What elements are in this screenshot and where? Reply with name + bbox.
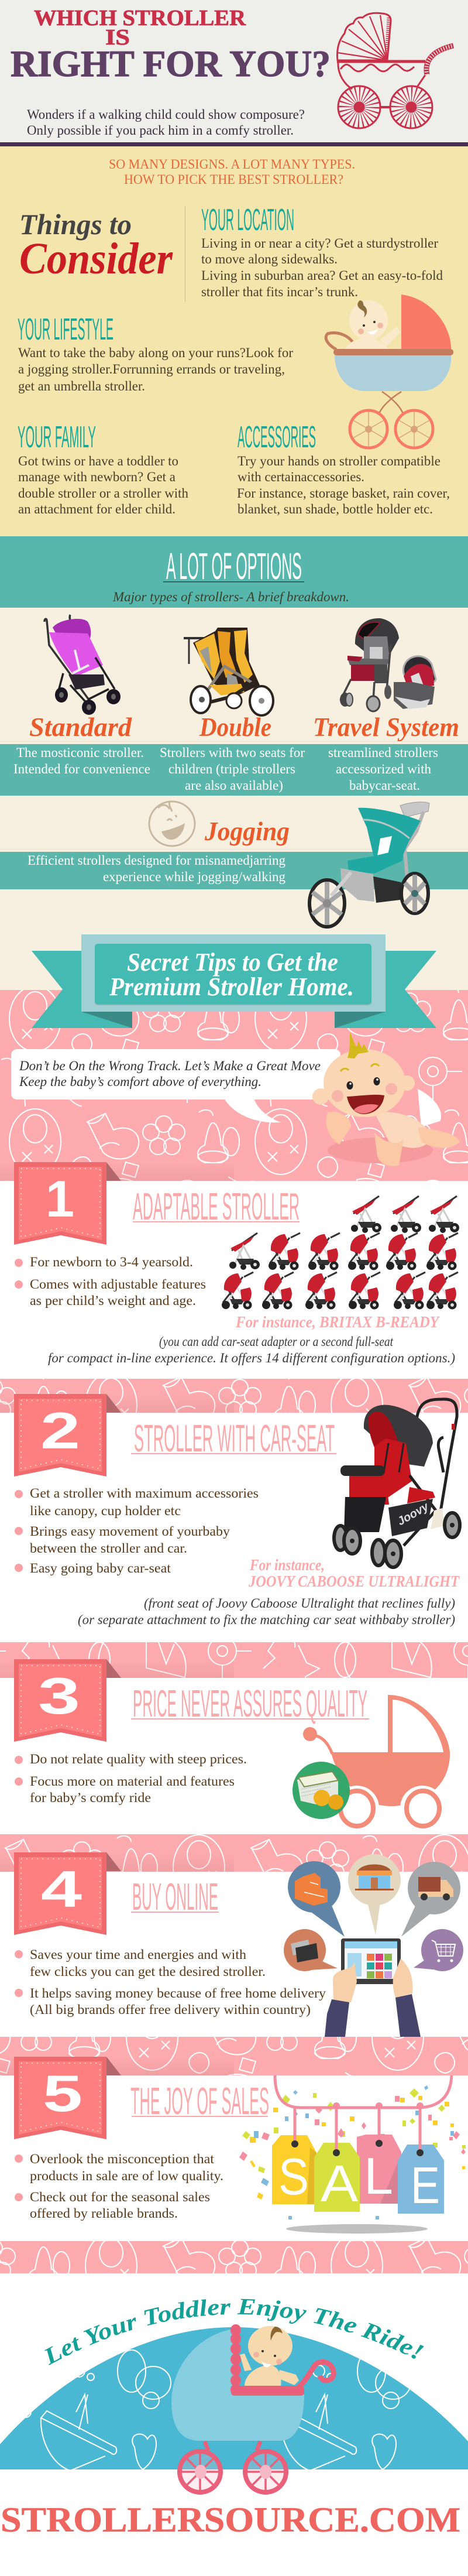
icon: pram silhouette bbox=[303, 1695, 450, 1830]
title line 1: WHICH STROLLER bbox=[34, 6, 246, 30]
badge: number 4 bbox=[14, 1852, 121, 1935]
example note bbox=[78, 1596, 455, 1627]
section 4: buy online: BUY ONLINE bbox=[132, 1875, 218, 1918]
block: your family: manage with newborn? Get a bbox=[18, 470, 176, 484]
sale tags illustration: L bbox=[364, 2147, 393, 2205]
description: standard: The mosticonic stroller. bbox=[16, 745, 144, 760]
icon: truck bubble bbox=[401, 1862, 460, 1937]
block: accessories: with certainaccessories. bbox=[238, 470, 364, 484]
bullet list: Get a stroller with maximum accessories bbox=[30, 1486, 259, 1501]
panel: header bbox=[0, 0, 468, 146]
icon: crawling baby bbox=[312, 1032, 460, 1166]
ribbon banner bbox=[32, 934, 436, 1028]
bullet list: It helps saving money because of free home delivery bbox=[30, 1986, 326, 2000]
bullet list bbox=[15, 2152, 223, 2221]
icon: laughing baby face bbox=[149, 801, 195, 846]
badge: number 5 bbox=[14, 2057, 121, 2139]
heading: things to: Things to bbox=[19, 208, 132, 241]
description: travel system: streamlined strollers bbox=[328, 745, 438, 760]
example label: For instance, BRITAX B-READY bbox=[235, 1313, 440, 1331]
block: your family: an attachment for elder child. bbox=[18, 502, 176, 516]
description: double: Strollers with two seats for bbox=[160, 745, 305, 760]
icon: store bubble bbox=[348, 1854, 401, 1935]
icon: baby in pink and blue pram bbox=[171, 2324, 333, 2492]
block: your location: Living in or near a city? Get a sturdystroller bbox=[201, 236, 438, 251]
section 1: adaptable stroller bbox=[14, 1162, 459, 1365]
block: your location bbox=[201, 203, 443, 299]
bullet list: Focus more on material and features bbox=[30, 1774, 235, 1789]
bullet list: Easy going baby car-seat bbox=[30, 1561, 171, 1575]
sale tags illustration: A bbox=[321, 2154, 358, 2212]
label: travel system: Travel System bbox=[313, 712, 459, 742]
footer panel bbox=[0, 2298, 468, 2539]
bullet list: for baby’s comfy ride bbox=[30, 1790, 151, 1805]
title line 3: RIGHT FOR YOU? bbox=[11, 43, 331, 84]
block: accessories: blanket, sun shade, bottle holder etc. bbox=[238, 502, 433, 516]
intro text bbox=[27, 107, 305, 138]
bullet list: (All big brands offer free delivery within country) bbox=[30, 2002, 311, 2017]
block: your location: to move along sidewalks. bbox=[201, 252, 338, 266]
icon: hands holding tablet bbox=[325, 1938, 421, 2037]
badge: number 1: 1 bbox=[46, 1170, 74, 1228]
badge: number 1 bbox=[14, 1162, 121, 1245]
grid of 15 stroller configurations bbox=[222, 1196, 459, 1309]
block: your family: YOUR FAMILY bbox=[18, 420, 96, 454]
block: your lifestyle bbox=[18, 313, 293, 393]
bullet list bbox=[15, 1752, 247, 1805]
subheading bbox=[109, 157, 355, 187]
closing pink band bbox=[0, 2241, 468, 2273]
sale tags illustration bbox=[239, 2075, 466, 2234]
bullet list: between the stroller and car. bbox=[30, 1541, 187, 1556]
panel: secret tips hero bbox=[0, 934, 468, 1181]
panel: a lot of options bbox=[0, 536, 468, 990]
icon: credit cards bubble bbox=[284, 1929, 338, 1971]
subheading: HOW TO PICK THE BEST STROLLER? bbox=[124, 172, 343, 187]
block: accessories bbox=[237, 420, 450, 516]
example note: (you can add car-seat adapter or a second full-seat bbox=[159, 1334, 394, 1349]
icon: parcels bubble bbox=[288, 1861, 345, 1937]
description: travel system bbox=[328, 745, 438, 793]
block: accessories: For instance, storage basket, rain cover, bbox=[237, 486, 450, 501]
stroller: standard bbox=[44, 615, 121, 715]
badge: number 4: 4 bbox=[41, 1860, 82, 1918]
badge: number 3 bbox=[14, 1659, 121, 1742]
section 5: the joy of sales bbox=[0, 2037, 468, 2234]
speech bubble bbox=[11, 1049, 340, 1122]
stroller: joovy caboose: Joovy bbox=[395, 1500, 431, 1528]
block: your location: Living in suburban area? Get an easy-to-fold bbox=[201, 268, 443, 283]
icon: cart bubble bbox=[414, 1929, 463, 1971]
intro text: Only possible if you pack him in a comfy stroller. bbox=[27, 123, 294, 138]
heading: consider: Consider bbox=[19, 234, 173, 283]
example label bbox=[248, 1556, 460, 1590]
block: accessories: ACCESSORIES bbox=[238, 420, 316, 454]
bullet list bbox=[15, 1255, 206, 1308]
subheading: Major types of strollers- A brief breakdown. bbox=[112, 590, 349, 604]
panel: things to consider bbox=[0, 146, 468, 536]
speech bubble: Keep the baby’s comfort above of everything. bbox=[19, 1074, 261, 1089]
subheading: SO MANY DESIGNS. A LOT MANY TYPES. bbox=[109, 157, 355, 172]
block: your family: Got twins or have a toddler to bbox=[18, 454, 178, 468]
bullet list: For newborn to 3-4 yearsold. bbox=[30, 1255, 193, 1269]
ribbon title: Secret Tips to Get the bbox=[127, 948, 338, 977]
section 2: stroller with car-seat bbox=[0, 1379, 468, 1627]
band: jogging description: Efficient strollers designed for misnamedjarring bbox=[27, 853, 285, 868]
description: double: are also available) bbox=[185, 778, 283, 793]
blue dome with pattern bbox=[0, 2327, 468, 2469]
bullet list: offered by reliable brands. bbox=[30, 2206, 178, 2221]
block: accessories: Try your hands on stroller compatible bbox=[238, 454, 441, 468]
bullet list: as per child’s weight and age. bbox=[30, 1293, 196, 1308]
closing slogan on arc: Let Your Toddler Enjoy The Ride! bbox=[44, 2298, 424, 2365]
badge: number 2 bbox=[14, 1394, 121, 1477]
stroller: jogging bbox=[309, 802, 429, 927]
description: travel system: accessorized with bbox=[336, 762, 431, 776]
badge: number 3: 3 bbox=[38, 1667, 80, 1725]
description: standard bbox=[13, 745, 150, 776]
sale tags illustration: S bbox=[278, 2147, 309, 2205]
bullet list: Check out for the seasonal sales bbox=[30, 2190, 210, 2204]
band: jogging description bbox=[0, 852, 468, 889]
example note: (or separate attachment to fix the matching car seat withbaby stroller) bbox=[78, 1612, 455, 1627]
bullet list: few clicks you can get the desired stroller. bbox=[30, 1964, 266, 1979]
description: travel system: babycar-seat. bbox=[349, 778, 420, 793]
block: your lifestyle: a jogging stroller.Forrunning errands or traveling, bbox=[18, 362, 285, 376]
icon: baby in blue stroller bbox=[326, 294, 453, 448]
label: jogging: Jogging bbox=[204, 817, 290, 846]
band: jogging description: experience while jogging/walking bbox=[103, 869, 285, 884]
bullet list: Do not relate quality with steep prices. bbox=[30, 1752, 247, 1766]
speech bubble: Don’t be On the Wrong Track. Let’s Make a Great Move bbox=[19, 1059, 321, 1073]
bullet list: products in sale are of low quality. bbox=[30, 2169, 223, 2183]
bullet list bbox=[15, 1486, 259, 1575]
title line 2: IS bbox=[105, 25, 130, 50]
badge: number 2: 2 bbox=[40, 1402, 80, 1460]
example label: For instance, bbox=[249, 1556, 325, 1574]
block: your lifestyle: get an umbrella stroller. bbox=[18, 379, 145, 393]
bullet list: like canopy, cup holder etc bbox=[30, 1503, 181, 1518]
block: your lifestyle: Want to take the baby along on your runs?Look for bbox=[18, 345, 293, 360]
bullet list: Comes with adjustable features bbox=[30, 1277, 206, 1292]
band: type descriptions bbox=[0, 744, 468, 796]
ribbon title bbox=[109, 948, 354, 1001]
label: standard: Standard bbox=[29, 712, 133, 742]
description: double: children (triple strollers bbox=[168, 762, 295, 776]
section 3: price never assures quality bbox=[0, 1642, 468, 1830]
bullet list: Overlook the misconception that bbox=[30, 2152, 215, 2166]
stroller: travel system bbox=[340, 618, 436, 711]
icon: sketched red pram bbox=[337, 13, 453, 128]
intro text: Wonders if a walking child could show composure? bbox=[27, 107, 305, 122]
block: your family: double stroller or a stroller with bbox=[18, 486, 188, 501]
sale tags illustration: E bbox=[411, 2156, 440, 2214]
label: double: Double bbox=[199, 712, 271, 742]
example note: for compact in-line experience. It offers 14 different configuration options.) bbox=[48, 1351, 455, 1365]
description: standard: Intended for convenience bbox=[13, 762, 150, 776]
stroller: double bbox=[184, 628, 273, 715]
bullet list: Brings easy movement of yourbaby bbox=[30, 1524, 230, 1539]
website url: STROLLERSOURCE.COM bbox=[1, 2500, 460, 2539]
example note: (front seat of Joovy Caboose Ultralight that reclines fully) bbox=[144, 1596, 455, 1611]
description: double bbox=[160, 745, 305, 793]
section 4: buy online bbox=[0, 1834, 468, 2037]
bullet list: Saves your time and energies and with bbox=[30, 1947, 247, 1962]
block: your family bbox=[18, 420, 188, 516]
ribbon title: Premium Stroller Home. bbox=[109, 972, 354, 1001]
bullet list bbox=[15, 1947, 326, 2017]
badge: number 5: 5 bbox=[43, 2064, 82, 2122]
block: your lifestyle: YOUR LIFESTYLE bbox=[18, 313, 113, 347]
stroller: joovy caboose bbox=[334, 1399, 460, 1567]
block: your location: YOUR LOCATION bbox=[201, 203, 294, 237]
example note bbox=[48, 1334, 455, 1365]
block: your location: stroller that fits incar’s trunk. bbox=[201, 285, 358, 299]
icon: money in green circle bbox=[292, 1762, 350, 1819]
